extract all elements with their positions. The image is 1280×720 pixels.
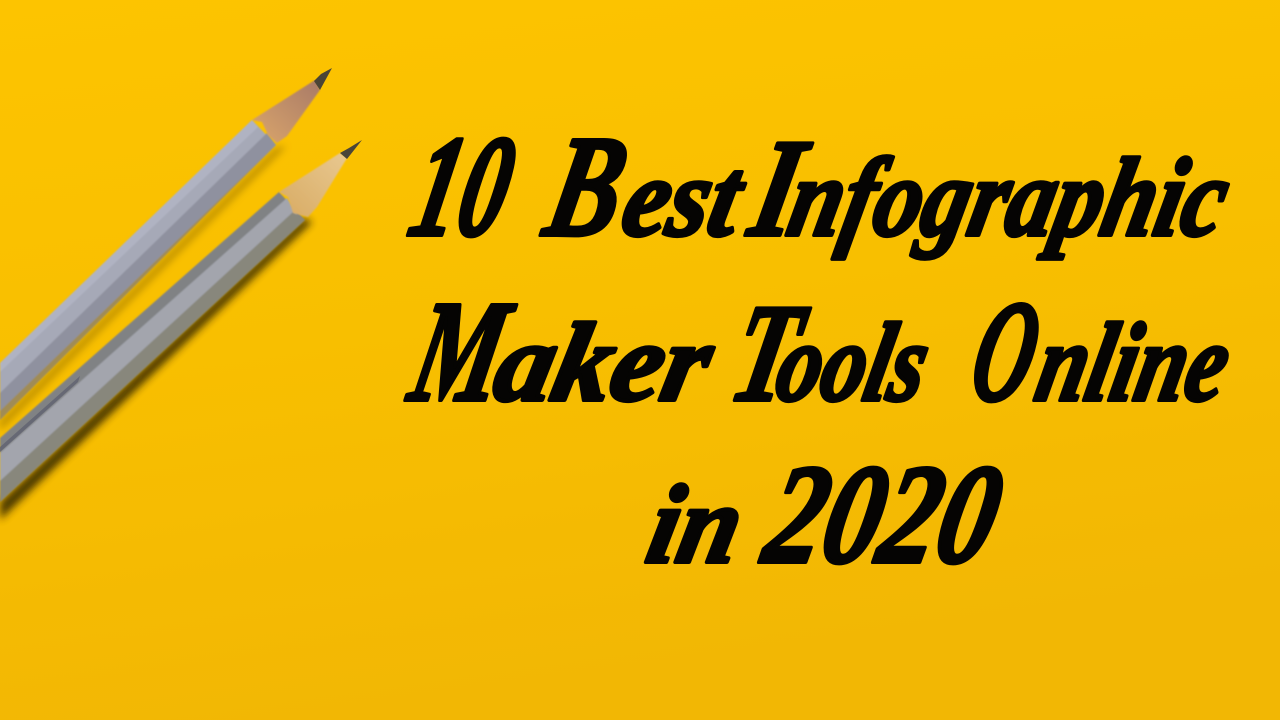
- title line 1: B: [533, 105, 641, 267]
- pencil graphite: [340, 140, 362, 159]
- title line 1: 10: [398, 105, 528, 267]
- title line 2: [398, 270, 1241, 432]
- pencil: upper: [0, 68, 332, 430]
- pencil body: [0, 120, 276, 420]
- pencil shadow: [0, 218, 312, 520]
- title line 2: O: [959, 270, 1054, 432]
- title line 2: ools: [767, 301, 940, 425]
- pencil wood tip: [279, 153, 347, 217]
- title: [398, 105, 1241, 594]
- title line 2: T: [719, 275, 818, 431]
- pencil: lower: [0, 140, 362, 520]
- title line 3: [638, 436, 1015, 594]
- title line 3: in: [638, 463, 754, 587]
- title line 1: [398, 105, 1240, 267]
- pencil graphite: [314, 68, 332, 90]
- title line 3: 2020: [752, 436, 1015, 594]
- title line 1: est: [613, 136, 756, 260]
- title line 1: I: [738, 110, 820, 266]
- pencil body: [0, 192, 305, 502]
- pencil wood tip: [252, 80, 320, 143]
- title line 2: aker: [485, 301, 724, 425]
- title line 2: M: [398, 270, 525, 432]
- pencil imprint: [0, 376, 80, 452]
- pencil shadow: [0, 146, 286, 430]
